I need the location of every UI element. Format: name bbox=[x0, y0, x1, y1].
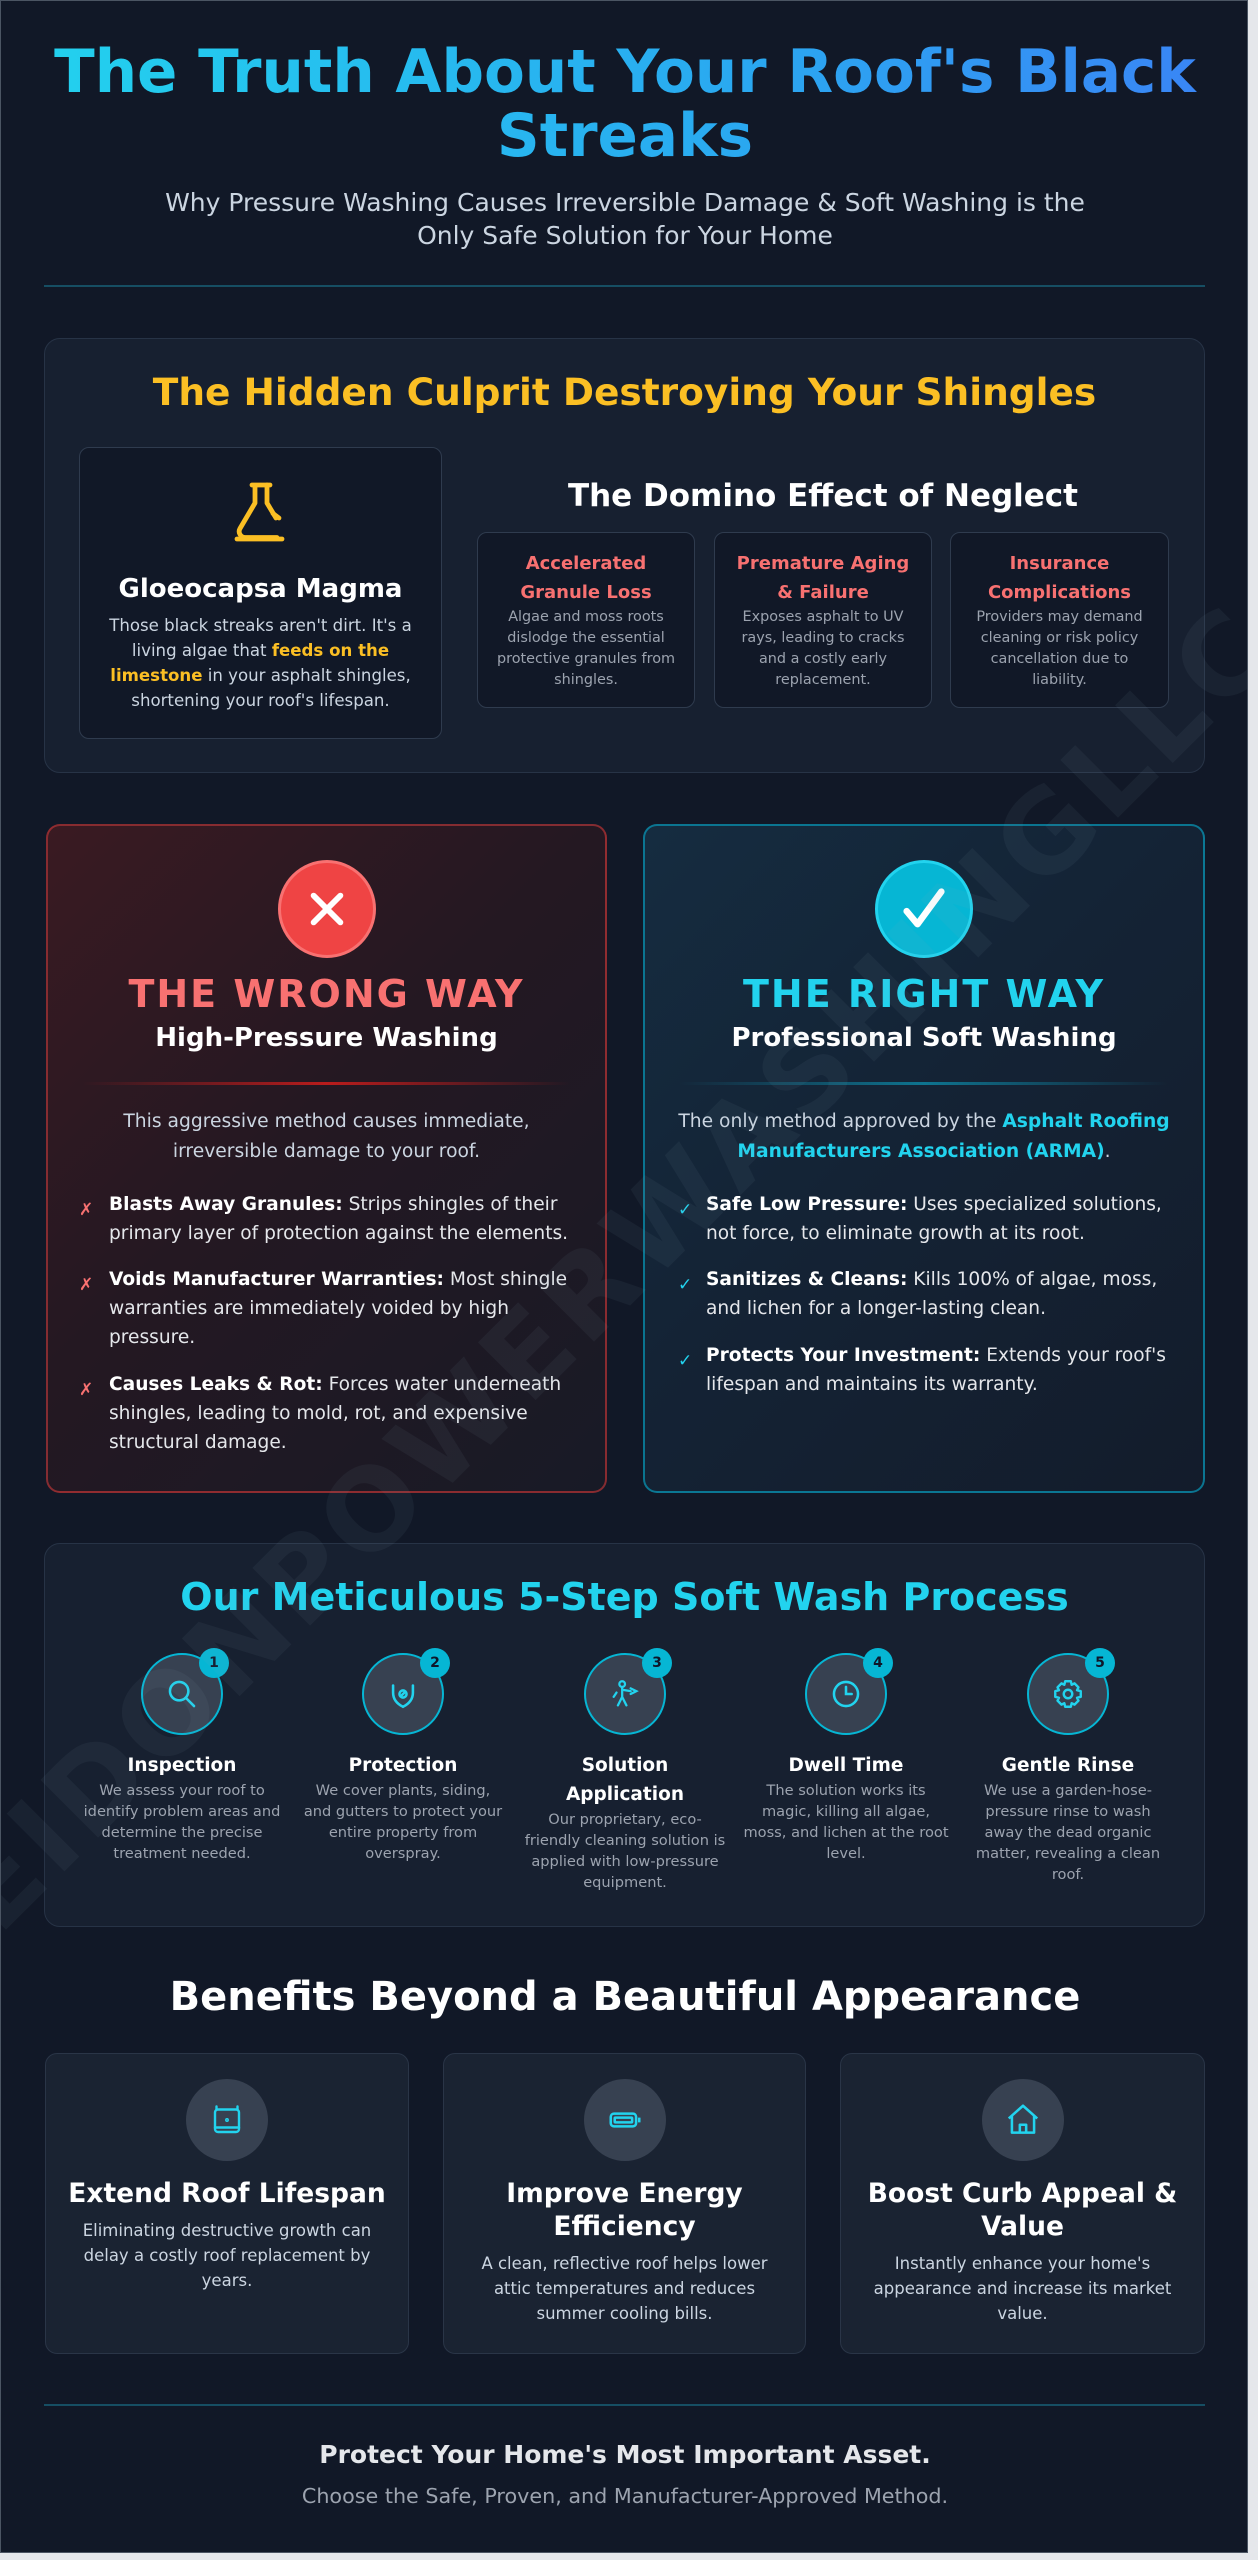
list: right way bullets: lifespan and maintains its warranty. bbox=[706, 1374, 1038, 1395]
card: energy efficiency: Efficiency bbox=[553, 2211, 696, 2242]
step 2: Protection bbox=[349, 1755, 457, 1776]
step 4: 4 bbox=[873, 1655, 883, 1671]
card: granule loss: shingles. bbox=[554, 672, 618, 688]
card: granule loss bbox=[477, 532, 695, 708]
step 1: determine the precise bbox=[102, 1824, 262, 1841]
card: premature aging: & Failure bbox=[777, 582, 869, 603]
icon: battery bbox=[584, 2079, 666, 2161]
card: granule loss: dislodge the essential bbox=[507, 630, 665, 646]
card: curb appeal: Boost Curb Appeal & bbox=[868, 2178, 1177, 2209]
card: premature aging bbox=[714, 532, 932, 708]
heading: domino effect: The Domino Effect of Neglect bbox=[568, 478, 1078, 514]
step 4: level. bbox=[826, 1845, 866, 1862]
step 3: Application bbox=[566, 1784, 684, 1805]
step 1: Inspection bbox=[128, 1755, 236, 1776]
card: premature aging: Exposes asphalt to UV bbox=[742, 609, 903, 625]
list: right way bullets: ✓ bbox=[678, 1351, 692, 1371]
step 5: pressure rinse to wash bbox=[985, 1803, 1151, 1820]
card: energy efficiency: summer cooling bills. bbox=[536, 2304, 713, 2323]
step 4 bbox=[743, 1648, 949, 1862]
list: wrong way bullets: Voids Manufacturer Warranties: Most shingle bbox=[109, 1269, 567, 1290]
step 3: friendly cleaning solution is bbox=[525, 1832, 725, 1849]
step 5: Gentle Rinse bbox=[1002, 1755, 1134, 1776]
step 2: entire property from bbox=[329, 1824, 477, 1841]
list: right way bullets: ✓ bbox=[678, 1200, 692, 1220]
icon: tablet bbox=[186, 2079, 268, 2161]
text: gloeocapsa description: Those black streaks aren't dirt. It's a bbox=[109, 616, 412, 635]
list: wrong way bullets: structural damage. bbox=[109, 1432, 287, 1453]
list: wrong way bullets bbox=[79, 1194, 568, 1453]
card: curb appeal: value. bbox=[997, 2304, 1048, 2323]
step 3: equipment. bbox=[583, 1874, 667, 1891]
text: gloeocapsa description: shortening your roof's lifespan. bbox=[131, 691, 390, 710]
text: gloeocapsa description: limestone in your asphalt shingles, bbox=[110, 666, 411, 685]
card: energy efficiency: A clean, reflective roof helps lower bbox=[481, 2254, 768, 2273]
card: granule loss: Granule Loss bbox=[520, 582, 652, 603]
card: extend roof lifespan: Extend Roof Lifespan bbox=[68, 2178, 386, 2209]
list: right way bullets: Safe Low Pressure: Uses specialized solutions, bbox=[706, 1194, 1162, 1215]
list: right way bullets bbox=[678, 1194, 1166, 1395]
text: wrong intro: irreversible damage to your roof. bbox=[173, 1141, 480, 1162]
step 2: and gutters to protect your bbox=[304, 1803, 502, 1820]
list: right way bullets: ✓ bbox=[678, 1275, 692, 1295]
list: right way bullets: Protects Your Investment: Extends your roof's bbox=[706, 1345, 1166, 1366]
step 1: 1 bbox=[209, 1655, 219, 1671]
heading: benefits: Benefits Beyond a Beautiful Appearance bbox=[170, 1974, 1080, 2020]
step 3: applied with low-pressure bbox=[531, 1853, 719, 1870]
card: granule loss: Accelerated bbox=[526, 553, 646, 574]
card: insurance: cleaning or risk policy bbox=[981, 630, 1138, 646]
list: wrong way bullets: pressure. bbox=[109, 1327, 195, 1348]
text: right intro: The only method approved by the Asphalt Roofing bbox=[678, 1111, 1170, 1132]
card: insurance: Insurance bbox=[1010, 553, 1109, 574]
text: gloeocapsa description bbox=[109, 616, 412, 710]
icon: check circle bbox=[875, 860, 973, 958]
step 3: Solution bbox=[582, 1755, 668, 1776]
list: right way bullets: not force, to eliminate growth at its root. bbox=[706, 1223, 1085, 1244]
icon: x circle bbox=[278, 860, 376, 958]
step 5 bbox=[976, 1648, 1160, 1883]
panel: hidden culprit bbox=[44, 338, 1205, 773]
list: wrong way bullets: shingles, leading to mold, rot, and expensive bbox=[109, 1403, 528, 1424]
card: granule loss: Algae and moss roots bbox=[508, 609, 664, 625]
card: extend roof lifespan: delay a costly roof replacement by bbox=[84, 2246, 370, 2265]
step 5: matter, revealing a clean bbox=[976, 1845, 1160, 1862]
heading: hidden culprit: The Hidden Culprit Destroying Your Shingles bbox=[153, 370, 1096, 414]
list: wrong way bullets: Causes Leaks & Rot: Forces water underneath bbox=[109, 1374, 561, 1395]
icon: flask bbox=[234, 482, 284, 542]
step 3 bbox=[525, 1648, 725, 1891]
step 5: away the dead organic bbox=[984, 1824, 1151, 1841]
step 5: 5 bbox=[1095, 1655, 1105, 1671]
step 2: overspray. bbox=[365, 1845, 441, 1862]
list: wrong way bullets: ✗ bbox=[79, 1380, 93, 1400]
step 2: We cover plants, siding, bbox=[316, 1782, 490, 1799]
card: energy efficiency: attic temperatures and reduces bbox=[494, 2279, 755, 2298]
card: premature aging: rays, leading to cracks bbox=[742, 630, 904, 646]
panel: right way bbox=[643, 824, 1205, 1493]
card: curb appeal: appearance and increase its market bbox=[874, 2279, 1171, 2298]
heading: the right way: THE RIGHT WAY bbox=[743, 972, 1105, 1016]
card: insurance: cancellation due to bbox=[991, 651, 1128, 667]
panel: wrong way bbox=[46, 824, 607, 1493]
card: insurance: Providers may demand bbox=[976, 609, 1143, 625]
text: wrong intro bbox=[123, 1111, 530, 1162]
card: extend roof lifespan: years. bbox=[202, 2271, 252, 2290]
step 4: moss, and lichen at the root bbox=[743, 1824, 949, 1841]
list: wrong way bullets: ✗ bbox=[79, 1275, 93, 1295]
card: insurance bbox=[950, 532, 1169, 708]
icon: house bbox=[982, 2079, 1064, 2161]
step 1 bbox=[84, 1648, 280, 1862]
step 2: 2 bbox=[430, 1655, 440, 1671]
list: wrong way bullets: ✗ bbox=[79, 1200, 93, 1220]
subtitle: Why Pressure Washing Causes Irreversible Damage & Soft Washing is the bbox=[165, 188, 1085, 217]
card: gloeocapsa magma bbox=[79, 447, 442, 739]
step 4: Dwell Time bbox=[789, 1755, 903, 1776]
title: The Truth About Your Roof's Black bbox=[54, 38, 1196, 107]
list: wrong way bullets: warranties are immediately voided by high bbox=[109, 1298, 509, 1319]
step 3: 3 bbox=[652, 1655, 662, 1671]
heading: the wrong way: THE WRONG WAY bbox=[128, 972, 525, 1016]
card: insurance: Complications bbox=[988, 582, 1131, 603]
step 2 bbox=[304, 1648, 502, 1862]
card: premature aging: replacement. bbox=[775, 672, 871, 688]
panel: process bbox=[44, 1543, 1205, 1927]
list: right way bullets: and lichen for a longer-lasting clean. bbox=[706, 1298, 1046, 1319]
card: granule loss: protective granules from bbox=[497, 651, 675, 667]
step 4: magic, killing all algae, bbox=[762, 1803, 930, 1820]
title bbox=[1, 41, 1249, 169]
step 4: The solution works its bbox=[766, 1782, 926, 1799]
card: curb appeal: Instantly enhance your home's bbox=[895, 2254, 1150, 2273]
card: curb appeal: Value bbox=[981, 2211, 1064, 2242]
card: curb appeal bbox=[840, 2053, 1205, 2354]
card: extend roof lifespan bbox=[45, 2053, 409, 2354]
list: wrong way bullets: Blasts Away Granules: Strips shingles of their bbox=[109, 1194, 557, 1215]
step 3: Our proprietary, eco- bbox=[548, 1811, 702, 1828]
card: premature aging: and a costly early bbox=[759, 651, 887, 667]
card: insurance: liability. bbox=[1032, 672, 1087, 688]
subtitle: Only Safe Solution for Your Home bbox=[417, 221, 833, 250]
step 5: roof. bbox=[1052, 1866, 1084, 1883]
text: gloeocapsa name: Gloeocapsa Magma bbox=[119, 574, 402, 604]
text: wrong intro: This aggressive method causes immediate, bbox=[123, 1111, 530, 1132]
title: Streaks bbox=[497, 102, 753, 171]
footer subline: Choose the Safe, Proven, and Manufacturer-Approved Method. bbox=[302, 2484, 948, 2508]
card: energy efficiency: Improve Energy bbox=[506, 2178, 743, 2209]
subheading: high pressure: High-Pressure Washing bbox=[155, 1023, 498, 1053]
card: energy efficiency bbox=[443, 2053, 806, 2354]
subheading: soft washing: Professional Soft Washing bbox=[731, 1023, 1117, 1053]
heading: process: Our Meticulous 5-Step Soft Wash Process bbox=[180, 1575, 1069, 1619]
step 1: identify problem areas and bbox=[84, 1803, 280, 1820]
subtitle bbox=[165, 188, 1085, 250]
step 1: We assess your roof to bbox=[99, 1782, 265, 1799]
card: premature aging: Premature Aging bbox=[737, 553, 909, 574]
card: extend roof lifespan: Eliminating destructive growth can bbox=[83, 2221, 371, 2240]
step 5: We use a garden-hose- bbox=[984, 1782, 1152, 1799]
list: right way bullets: Sanitizes & Cleans: Kills 100% of algae, moss, bbox=[706, 1269, 1157, 1290]
step 1: treatment needed. bbox=[113, 1845, 251, 1862]
list: wrong way bullets: primary layer of protection against the elements. bbox=[109, 1223, 568, 1244]
text: right intro bbox=[678, 1111, 1170, 1162]
text: right intro: Manufacturers Association (ARMA). bbox=[737, 1141, 1111, 1162]
text: gloeocapsa description: living algae that feeds on the bbox=[132, 641, 389, 660]
footer headline: Protect Your Home's Most Important Asset. bbox=[319, 2440, 931, 2469]
